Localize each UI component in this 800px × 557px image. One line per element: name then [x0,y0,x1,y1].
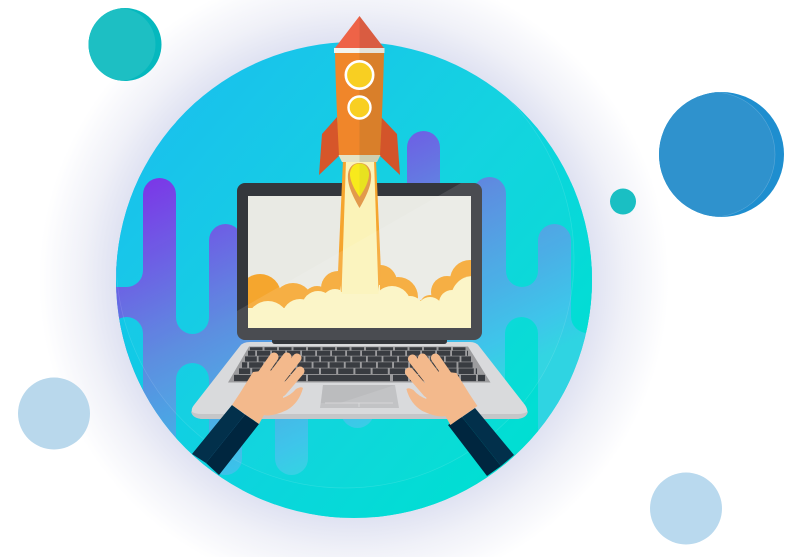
laptop [191,183,528,419]
rocket fins [319,117,400,175]
right arm and hand [406,358,514,476]
laptop bezel [237,183,482,340]
touchpad [320,385,399,408]
rocket collar [334,48,384,53]
left sleeve [192,405,259,475]
right sleeve [448,408,514,476]
rocket exhaust plume [338,160,381,294]
decorative circle: pale blue left [18,378,90,450]
rocket flame [348,163,371,208]
base front edge [191,411,528,419]
keyboard [228,346,490,382]
decorative circle: small teal [610,188,636,214]
main gradient disc with stripes [116,42,592,518]
rocket nozzle [338,155,380,162]
smoke clouds [248,260,471,328]
screen glare [237,183,482,340]
laptop screen [248,196,471,328]
hinge [272,339,447,344]
rocket [319,16,400,208]
decorative circle: pale blue bottom right [650,472,722,544]
rocket body [335,53,384,155]
decorative circle: teal top left [82,8,162,81]
laptop base [192,342,527,419]
rocket nose [335,16,384,48]
rocket window large [346,61,373,89]
decorative circle: large blue [650,92,784,217]
left hand [232,357,303,424]
right hand [406,358,477,425]
left arm and hand [192,357,303,475]
rocket window small [348,96,370,118]
